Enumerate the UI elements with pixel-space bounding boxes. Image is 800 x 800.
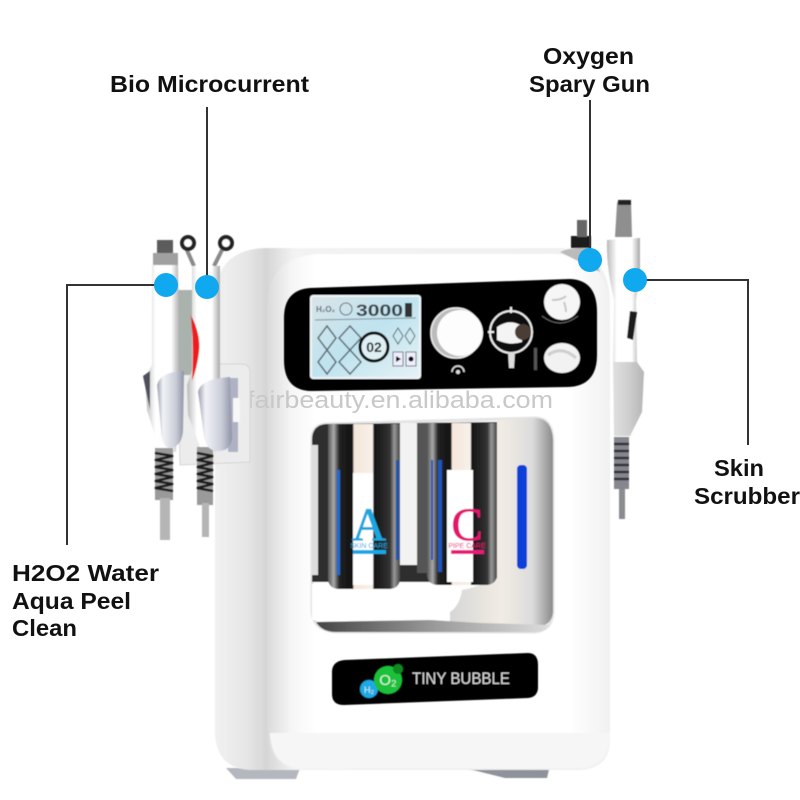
joystick control	[488, 307, 532, 368]
bottle C: PIPE CARE	[448, 543, 486, 550]
shelf shadow strip	[316, 620, 550, 632]
callout: H2O2 Water Aqua Peel Clean: H2O2 Water	[12, 560, 159, 586]
main dial	[431, 308, 483, 374]
side shell	[215, 248, 610, 770]
callout: Oxygen Spary Gun: Oxygen	[543, 43, 634, 69]
right grey wall	[450, 418, 553, 628]
callout: Skin Scrubber	[623, 268, 800, 509]
H2 bubble	[360, 680, 378, 698]
logo text: TINY BUBBLE	[412, 670, 510, 688]
handpiece: H2O2 water aqua peel	[143, 240, 184, 540]
O2 bubble: O₂	[379, 672, 397, 689]
red accent	[191, 315, 199, 381]
LCD screen: 3000	[356, 301, 403, 320]
callout: Oxygen Spary Gun	[529, 43, 650, 272]
O2 bubble	[374, 664, 403, 694]
handpiece: bio microcurrent	[182, 237, 232, 537]
callout: H2O2 Water Aqua Peel Clean: Aqua Peel	[12, 588, 131, 614]
bottle A	[328, 424, 400, 589]
callout: Skin Scrubber: Skin	[714, 455, 764, 481]
logo plate	[332, 653, 538, 705]
bottle A: SKIN CARE	[350, 543, 388, 550]
callout: Skin Scrubber: Scrubber	[694, 483, 800, 509]
callout: Bio Microcurrent	[110, 71, 309, 299]
watermark: fairbeauty.en.alibaba.com	[247, 387, 553, 414]
handpiece bracket	[178, 364, 250, 465]
control panel	[284, 279, 597, 391]
white shelf	[312, 584, 462, 620]
bottle A: A	[352, 499, 386, 551]
callout: Oxygen Spary Gun: Spary Gun	[529, 71, 650, 97]
blue indicator bar	[517, 465, 527, 569]
LCD screen: 02	[366, 339, 382, 355]
callout: H2O2 Water Aqua Peel Clean: Clean	[12, 615, 77, 641]
machine feet	[226, 765, 550, 779]
lower right knob	[534, 343, 580, 373]
machine body	[215, 248, 610, 770]
LCD screen: H₂O₂	[316, 305, 336, 314]
window dark interior	[312, 422, 497, 582]
callout: H2O2 Water Aqua Peel Clean	[12, 273, 178, 641]
oxygen spray nozzle	[560, 220, 600, 272]
upper right knob	[542, 284, 580, 323]
bottle C	[427, 423, 497, 585]
gap shadow between handpieces	[176, 290, 194, 375]
handpiece: skin scrubber	[607, 200, 644, 519]
bottle window	[312, 418, 553, 632]
front shell	[268, 254, 610, 768]
black panel	[284, 279, 597, 391]
callout: Bio Microcurrent: Bio Microcurrent	[110, 71, 309, 97]
LCD screen	[311, 296, 420, 378]
H2 bubble: H₂	[364, 685, 374, 695]
bottle C: C	[451, 499, 483, 551]
